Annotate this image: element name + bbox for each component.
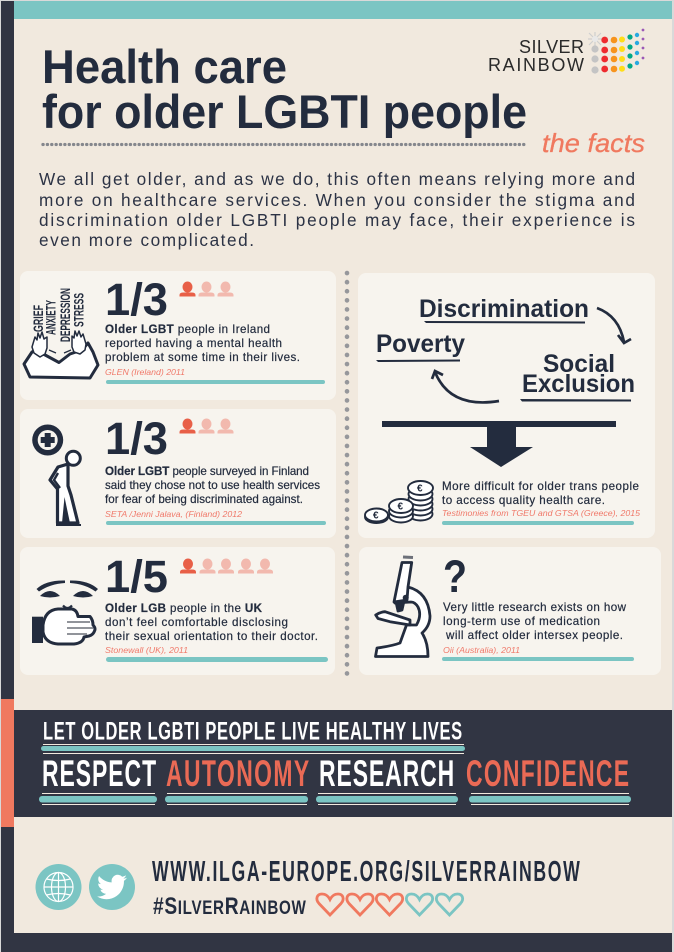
statistic: 1/3: 1/3 (105, 413, 168, 464)
icon: hands holding grief, anxiety, depression, stress: ANXIETY (42, 300, 58, 335)
text: Finland finding: Older LGBT people surveyed in Finland (105, 465, 309, 478)
icon: microscope (376, 557, 430, 656)
hashtag: #SILVERRAINBOW (153, 892, 306, 920)
keyword: Respect: RESPECT (42, 752, 156, 794)
word: Social Exclusion: Exclusion (522, 370, 635, 398)
icon: older person with medical cross (32, 424, 81, 525)
orange side accent (1, 699, 14, 827)
logo: Silver Rainbow: RAINBOW (488, 55, 584, 75)
keyword: Research: RESEARCH (319, 752, 454, 794)
icon row: one in three people (180, 282, 234, 296)
source: Stonewall (UK), 2011 (105, 645, 188, 655)
top teal band (14, 1, 672, 19)
icon: worried face with hand over mouth (32, 580, 98, 644)
intro paragraph: We all get older, and as we do, this often means relying more and (39, 169, 635, 189)
panel: trans people cycle of discrimination (358, 273, 655, 538)
text: UK finding: their sexual orientation to their doctor. (105, 630, 318, 643)
subtitle: the facts: the facts (542, 128, 645, 158)
logo: Silver Rainbow (488, 29, 644, 75)
source: Testimonies from TGEU and GTSA (Greece), 2015 (442, 508, 640, 518)
word: Discrimination: Discrimination (419, 295, 589, 323)
intro paragraph: more on healthcare services. When you consider the stigma and (39, 190, 635, 210)
icon: hands holding grief, anxiety, depression, stress: STRESS (70, 293, 86, 327)
title: Health care (42, 40, 287, 93)
intro paragraph (39, 169, 635, 250)
website url: WWW.ILGA-EUROPE.ORG/SILVERRAINBOW (152, 857, 580, 888)
text: Finland finding: said they chose not to use health services (105, 479, 320, 492)
text: Ireland finding (105, 323, 300, 364)
source: GLEN (Ireland) 2011 (105, 367, 185, 377)
text: trans finding: to access quality health care. (442, 494, 605, 507)
slogan underline (41, 744, 465, 754)
icon: hands holding grief, anxiety, depression, stress: GRIEF (30, 305, 46, 332)
title (42, 40, 527, 138)
text: trans finding: More difficult for older trans people (442, 480, 639, 493)
text: Ireland finding: reported having a mental health (105, 337, 282, 350)
icon: globe (36, 864, 82, 910)
word: Poverty: Poverty (376, 330, 465, 358)
intro paragraph: even more complicated. (39, 230, 254, 250)
text: intersex finding: Very little research exists on how (443, 601, 627, 614)
text: Ireland finding: problem at some time in their lives. (105, 351, 300, 364)
source: Oii (Australia), 2011 (443, 645, 520, 655)
arrow: discrimination to social exclusion (597, 308, 631, 343)
icon: hands holding grief, anxiety, depression, stress: DEPRESSION (57, 288, 73, 342)
panel: avoiding health services in Finland (20, 409, 336, 538)
statistic: 1/3: 1/3 (105, 274, 168, 325)
text: intersex finding: long-term use of medication (443, 615, 600, 628)
left sidebar (1, 1, 14, 952)
question mark: ? (443, 551, 467, 602)
panel: disclosure to doctors in the UK (20, 547, 335, 675)
statistic: 1/5: 1/5 (105, 551, 168, 602)
arrow: social exclusion to poverty (432, 371, 499, 402)
title: for older LGBTI people (42, 85, 527, 138)
icon: stacks of euro coins: € (398, 502, 404, 512)
bottom band (1, 933, 672, 952)
icon row: one in three people (180, 418, 234, 434)
panel: call to action banner (14, 710, 672, 817)
slogan heading: LET OLDER LGBTI PEOPLE LIVE HEALTHY LIVES (43, 718, 462, 745)
icon: hands holding grief, anxiety, depression, stress (24, 288, 98, 378)
word: Social Exclusion: Social (543, 350, 615, 378)
text: trans finding (442, 480, 639, 507)
keyword: Autonomy: AUTONOMY (166, 752, 310, 794)
text: UK finding: don’t feel comfortable disclosing (105, 616, 288, 629)
icon row: one in five people (180, 558, 273, 574)
text: Finland finding (105, 465, 320, 506)
text: UK finding: Older LGB people in the UK (105, 602, 263, 615)
text: Ireland finding: Older LGBT people in Ireland (105, 323, 270, 336)
keyword: Confidence: CONFIDENCE (466, 752, 629, 794)
icon: twitter bird (89, 864, 135, 910)
text: Finland finding: for fear of being discriminated against. (105, 493, 303, 506)
source: SETA /Jenni Jalava, (Finland) 2012 (105, 509, 242, 519)
panel: mental health in Ireland (20, 271, 336, 400)
icon: stacks of euro coins: € (373, 510, 379, 522)
panel: intersex research gap (359, 547, 661, 675)
hearts (317, 894, 463, 915)
icon: stacks of euro coins (365, 481, 433, 523)
logo: Silver Rainbow: SILVER (519, 37, 584, 57)
text: UK finding (105, 602, 318, 643)
intro paragraph: discrimination older LGBTI people may face, their experience is (39, 210, 635, 230)
icon: stacks of euro coins: € (417, 484, 423, 494)
word: Social Exclusion (520, 350, 635, 402)
text: intersex finding (443, 601, 627, 642)
bar and down arrow (382, 421, 616, 467)
text: intersex finding: will affect older intersex people. (445, 629, 623, 642)
